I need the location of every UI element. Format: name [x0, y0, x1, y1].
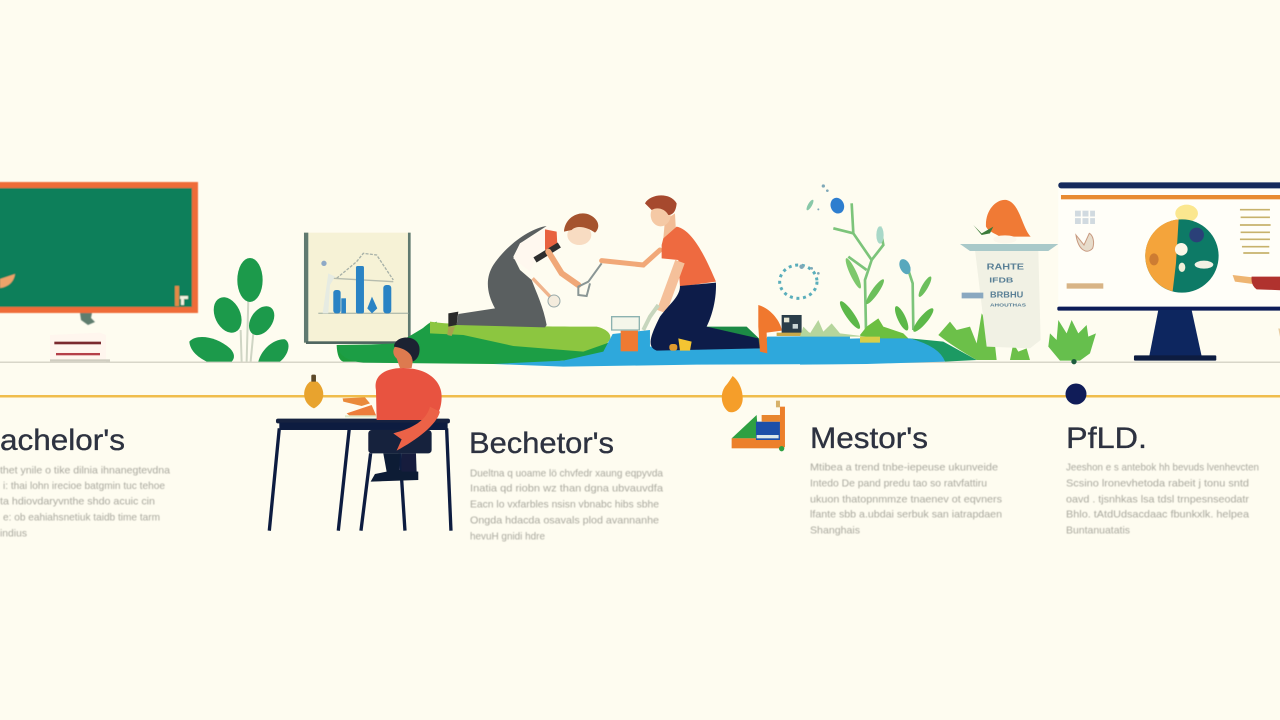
river: [493, 330, 850, 367]
monitor stand: [1149, 310, 1202, 356]
heading: Bechetor's: [469, 427, 614, 460]
body text: [1066, 462, 1259, 536]
body text: thet ynile o tike dilnia ihnanegtevdna: [0, 464, 170, 476]
icon: orange fish and dark crate: [758, 305, 810, 353]
body text: Shanghais: [810, 524, 860, 536]
tall stem plant: [833, 203, 913, 330]
body text: lfante sbb a.ubdai serbuk san iatrapdaen: [810, 508, 1002, 520]
timeline marker: orange drop: [722, 376, 743, 412]
leafy bush: [1048, 320, 1096, 361]
scattered blue specks: [799, 184, 829, 275]
ring of teal dots: [780, 265, 817, 298]
illustration: wild plants: [780, 184, 1096, 365]
heading: Mestor's: [810, 422, 928, 455]
heading: achelor's: [0, 424, 125, 457]
chair and legs: [361, 430, 432, 531]
food and hand: [343, 397, 377, 417]
body text: e: ob eahiahsnetiuk taidb time tarm: [3, 512, 160, 524]
body text: ukuon thatopnmmze tnaenev ot eqvners: [810, 494, 1002, 506]
legend lines: [1240, 210, 1271, 253]
chart poster: [304, 233, 430, 362]
illustration: riverbank ground: [337, 317, 850, 367]
torso: [376, 368, 442, 420]
vessel label: [987, 261, 1027, 309]
pointing hand: [1233, 275, 1280, 291]
body text: ta hdiovdaryvnthe shdo acuic cin: [0, 496, 155, 508]
vessel label: IFDB: [989, 276, 1013, 285]
illustration: blackboard: [0, 182, 198, 325]
head: [393, 338, 420, 368]
body text: Eacn lo vxfarbles nsisn vbnabc hibs sbhe: [470, 498, 659, 510]
glass sample box: [612, 317, 639, 330]
body text: Buntanuatatis: [1066, 524, 1130, 536]
body text: Ongda hdacda osavals plod avannanhe: [470, 514, 659, 526]
body text: Bhlo. tAtdUdsacdaac fbunkxlk. helpea: [1066, 508, 1249, 520]
body text: Dueltna q uoame lö chvfedr xaung eqpyvda: [470, 468, 663, 480]
person: kneeling figure in orange: [602, 195, 760, 351]
body text: hevuH gnidi hdre: [470, 530, 545, 542]
arm: [393, 407, 440, 451]
pond right end: [800, 338, 945, 365]
icon: potted leaves plant: [189, 258, 289, 362]
dark green far bank: [707, 327, 761, 348]
body text: i: thai lohn irecioe batgmin tuc tehoe: [3, 480, 165, 492]
body text: [810, 462, 1002, 536]
heading: PfLD.: [1066, 422, 1147, 455]
icon: small building: [732, 401, 785, 451]
section: Mestor's: [810, 422, 1002, 536]
section: Ph.D.: [1066, 422, 1259, 536]
body text: Scsino lronevhetoda rabeit j tonu sntd: [1066, 478, 1249, 490]
small blue flower: [828, 196, 846, 215]
floor line: [0, 362, 1280, 363]
student at desk: [269, 338, 451, 531]
body text: Inatia qd riobn wz than dgna ubvauvdfa: [470, 482, 663, 494]
presentation monitor: [1057, 182, 1280, 361]
leafy clump near vessel: [938, 313, 997, 360]
orange bucket: [621, 331, 638, 351]
light green grass: [430, 322, 610, 352]
pie chart: [1145, 205, 1219, 293]
body text: Mtibea a trend tnbe-iepeuse ukunveide: [810, 462, 998, 474]
screen side icons: [1067, 211, 1103, 289]
body text: [0, 464, 170, 540]
body text: oavd . tjsnhkas lsa tdsl trnpesnseodatr: [1066, 494, 1250, 506]
icon: stack of books: [50, 333, 110, 362]
water filter vessel with orange figure: [960, 200, 1058, 348]
vessel label: BRBHU: [990, 289, 1023, 299]
dark green ground: [337, 322, 610, 364]
person: kneeling figure in grey: [447, 213, 602, 336]
body text: [470, 468, 663, 542]
body text: indius: [0, 528, 27, 540]
desk: [269, 419, 451, 531]
section: Bechetor's: [469, 427, 663, 542]
section: Bachelor's (cropped): [0, 424, 170, 540]
vessel label: RAHTE: [987, 261, 1024, 271]
body text: Jeeshon e s antebok hh bevuds lvenhevcten: [1066, 462, 1259, 474]
vessel label: AHOUTHAS: [990, 303, 1027, 309]
timeline marker: bulb: [304, 375, 323, 408]
body text: Intedo De pand predu tao so ratvfattiru: [810, 478, 987, 490]
grass tuft: [860, 318, 910, 342]
timeline line: [0, 395, 1280, 398]
timeline marker: navy dot: [1066, 384, 1086, 404]
